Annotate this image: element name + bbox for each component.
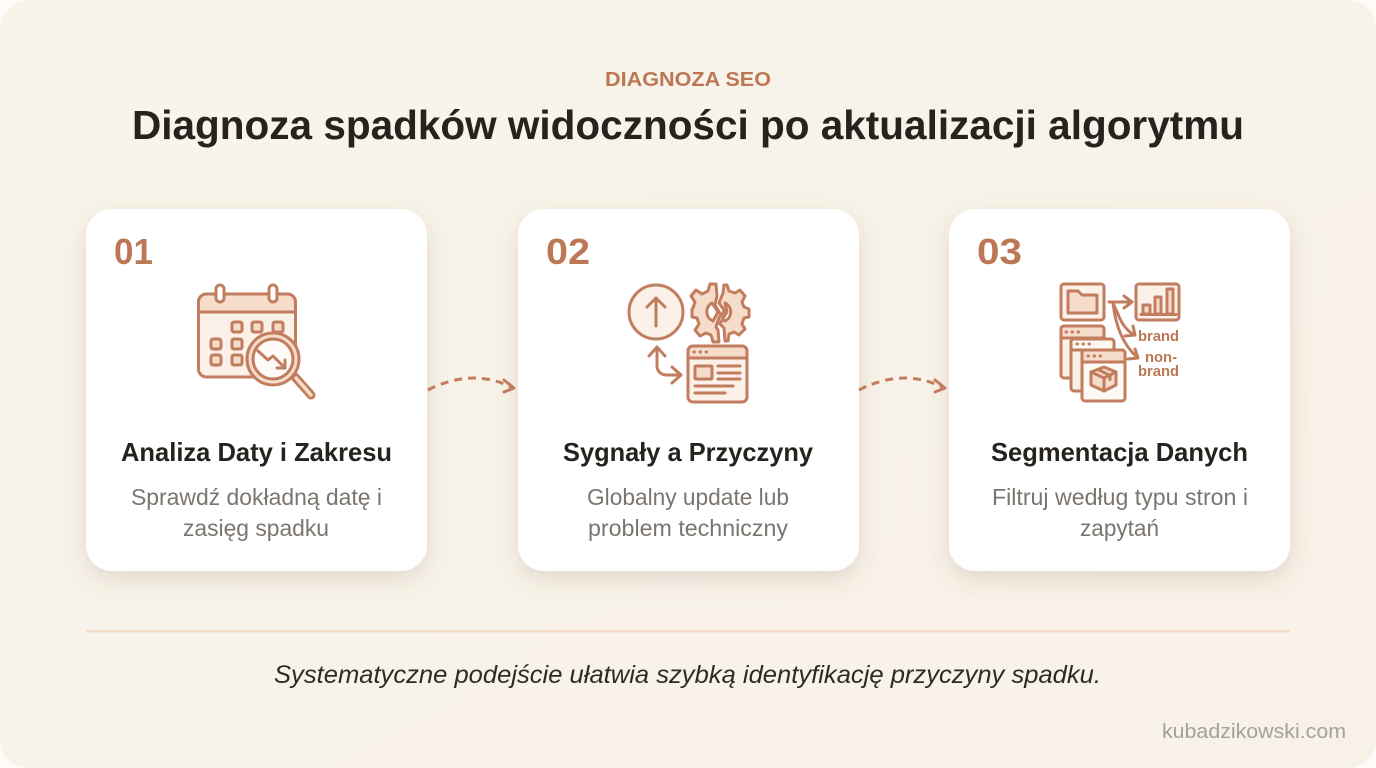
step description: Globalny update lub xyxy=(587,484,789,510)
icon labels xyxy=(1138,329,1179,380)
panel: step 1 xyxy=(86,209,427,571)
icon: update arrow, broken gear, browser window xyxy=(629,284,749,402)
step heading: Segmentacja Danych xyxy=(991,437,1248,467)
step description: problem techniczny xyxy=(588,515,788,541)
step description: zapytań xyxy=(1080,515,1159,541)
closing statement: Systematyczne podejście ułatwia szybką identyfikację przyczyny spadku. xyxy=(274,661,1101,689)
eyebrow heading: DIAGNOZA SEO xyxy=(605,69,771,91)
icon labels: brand xyxy=(1138,329,1179,345)
step number 03: 03 xyxy=(977,231,1022,272)
panel: step 2 xyxy=(518,209,859,571)
step description xyxy=(587,484,789,541)
step description: Filtruj według typu stron i xyxy=(992,484,1248,510)
step number 02: 02 xyxy=(546,231,590,272)
step description xyxy=(131,484,382,541)
step description: zasięg spadku xyxy=(183,515,329,541)
arrow: step 2 to step 3 xyxy=(859,378,945,392)
step number 01: 01 xyxy=(114,231,153,272)
icon: calendar with magnifier xyxy=(198,285,311,395)
step heading: Analiza Daty i Zakresu xyxy=(121,437,392,467)
icon labels: brand xyxy=(1138,364,1179,380)
step description: Sprawdź dokładną datę i xyxy=(131,484,382,510)
step heading: Sygnały a Przyczyny xyxy=(563,437,814,467)
icon labels: non- xyxy=(1145,350,1177,366)
panel: step 3 xyxy=(949,209,1290,571)
title: Diagnoza spadków widoczności po aktualizacji algorytmu xyxy=(132,102,1244,148)
arrow: step 1 to step 2 xyxy=(428,378,514,392)
step description xyxy=(992,484,1248,541)
website credit: kubadzikowski.com xyxy=(1162,721,1346,743)
icon: folder, chart, pages and brand split xyxy=(1061,284,1179,401)
